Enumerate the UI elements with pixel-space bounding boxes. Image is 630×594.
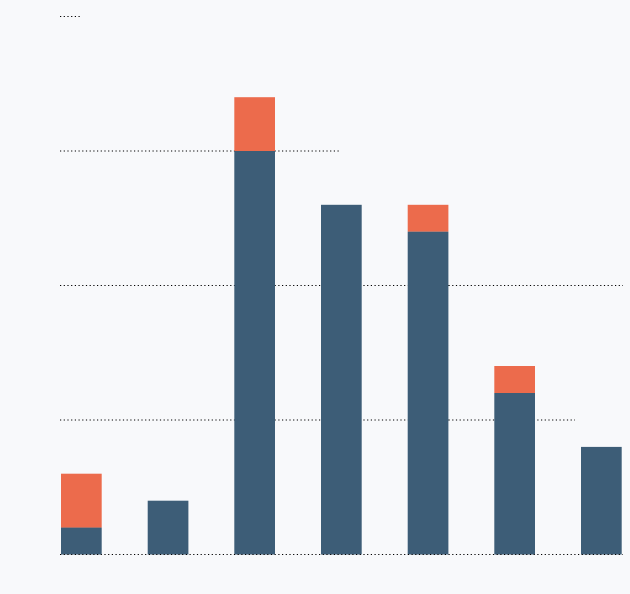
bar 4 [321,205,362,555]
bar 2 [148,501,188,554]
bar 1 [61,474,102,554]
bar 6 [494,366,535,554]
bar 3 [234,97,275,554]
bar 7 [581,447,622,554]
bar 5 [408,205,448,555]
